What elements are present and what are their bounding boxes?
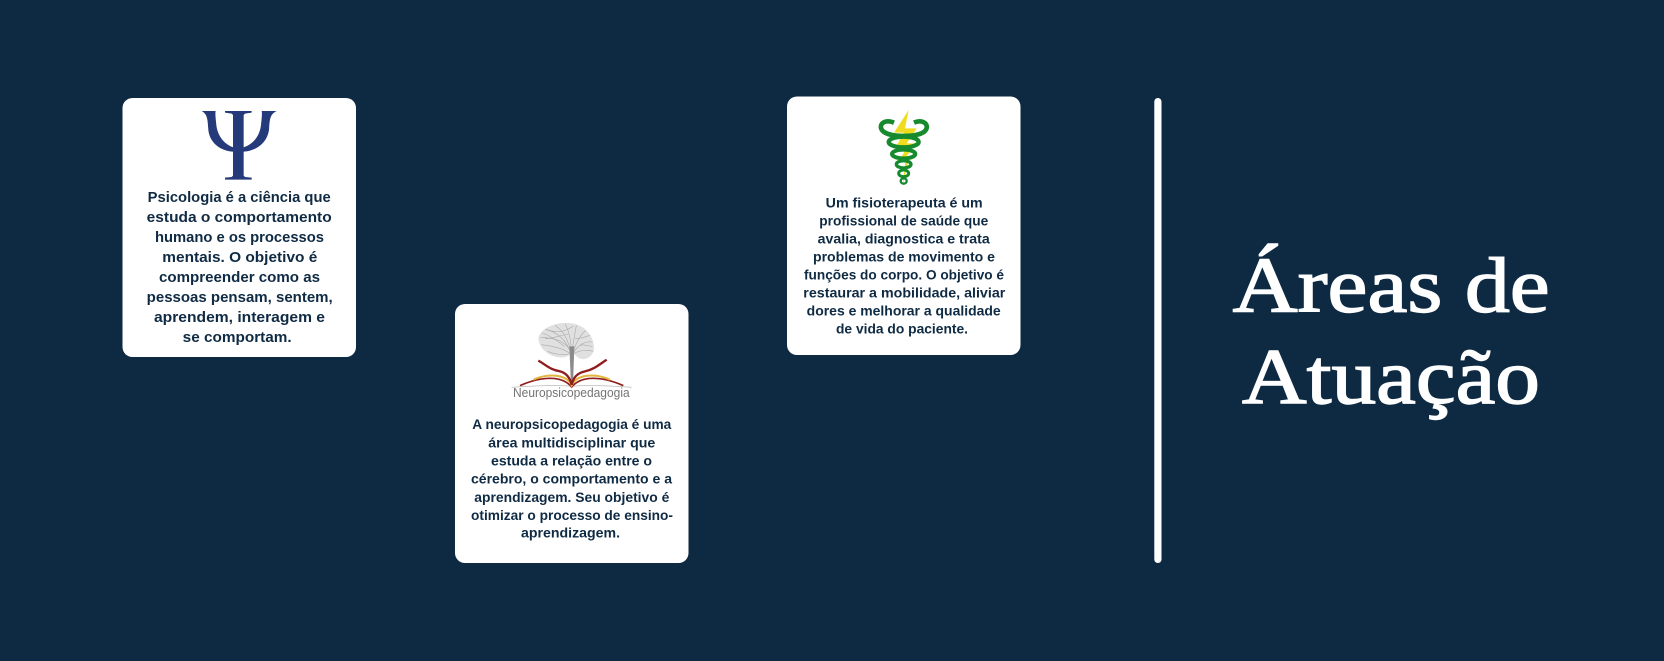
icon: brain and open book logo <box>512 323 632 400</box>
icon: caduceus with lightning bolt <box>881 110 927 186</box>
title: Atuação <box>1242 333 1540 420</box>
text block: fisioterapia: restaurar a mobilidade, aliviar <box>803 285 1006 300</box>
text block: psicologia: mentais. O objetivo é <box>162 250 317 266</box>
text block: psicologia: Psicologia é a ciência que <box>148 190 331 206</box>
text block: neuropsicopedagogia: cérebro, o comportamento e a <box>471 472 672 486</box>
title <box>1233 242 1550 420</box>
panel: neuropsicopedagogia <box>455 304 688 563</box>
text block: fisioterapia: dores e melhorar a qualidade <box>807 303 1001 318</box>
text block: fisioterapia: problemas de movimento e <box>813 249 995 264</box>
text block: fisioterapia: avalia, diagnostica e trata <box>818 231 990 246</box>
text block: fisioterapia: de vida do paciente. <box>836 321 968 336</box>
text block: neuropsicopedagogia: aprendizagem. <box>521 526 620 540</box>
text block: fisioterapia: Um fisioterapeuta é um <box>826 195 983 210</box>
text block: fisioterapia <box>803 195 1006 336</box>
text block: neuropsicopedagogia: aprendizagem. Seu objetivo é <box>474 490 670 505</box>
text block: neuropsicopedagogia: otimizar o processo de ensino- <box>471 508 673 523</box>
text block: psicologia: estuda o comportamento <box>147 210 332 226</box>
logo wordmark: Neuropsicopedagogia <box>513 386 631 400</box>
text block: psicologia: se comportam. <box>183 330 292 346</box>
text block: neuropsicopedagogia <box>471 417 673 540</box>
text block: fisioterapia: profissional de saúde que <box>819 213 989 228</box>
text block: fisioterapia: funções do corpo. O objetivo é <box>804 267 1004 282</box>
title: Áreas de <box>1233 242 1550 329</box>
text block: neuropsicopedagogia: A neuropsicopedagogia é uma <box>472 417 672 432</box>
text block: neuropsicopedagogia: área multidisciplinar que <box>488 435 656 450</box>
text block: psicologia: pessoas pensam, sentem, <box>147 290 333 306</box>
text block: psicologia: humano e os processos <box>155 230 324 246</box>
text block: psicologia: aprendem, interagem e <box>154 310 325 326</box>
text block: psicologia: compreender como as <box>159 270 320 286</box>
panel: fisioterapia <box>787 96 1020 355</box>
icon: psi symbol <box>202 111 277 180</box>
panel: psicologia <box>122 98 356 357</box>
text block: psicologia <box>147 190 333 346</box>
text block: neuropsicopedagogia: estuda a relação entre o <box>491 454 652 468</box>
